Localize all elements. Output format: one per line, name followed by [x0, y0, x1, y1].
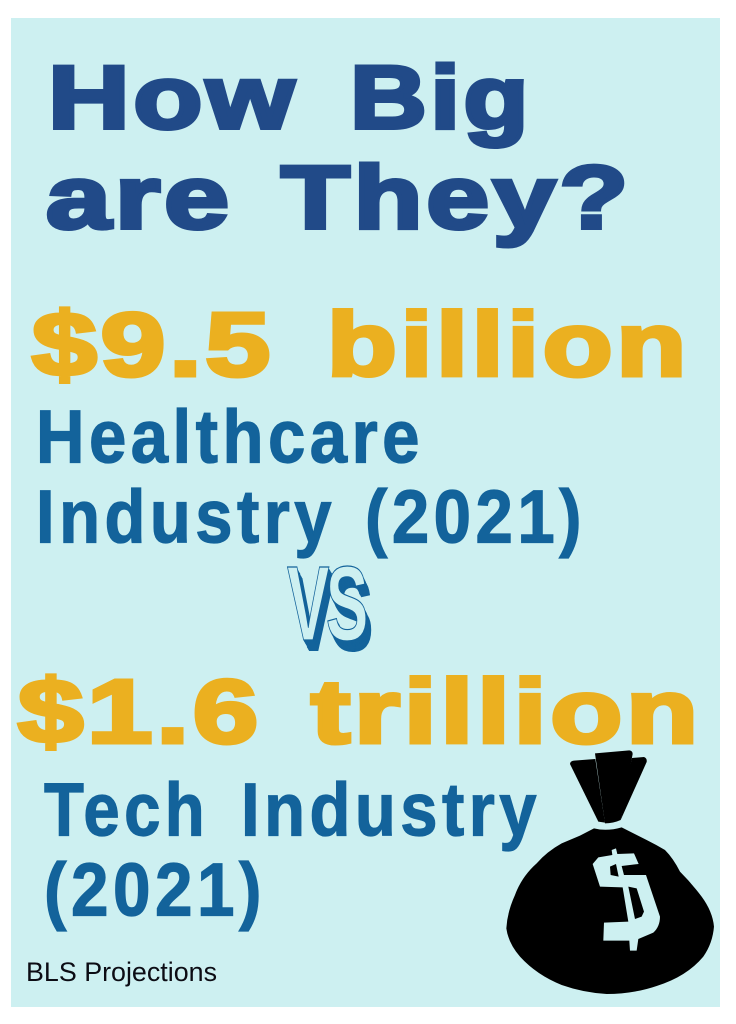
source note: BLS Projections — [26, 957, 217, 987]
label: tech industry — [44, 768, 541, 932]
label: healthcare industry: Industry — [36, 474, 336, 558]
stat: healthcare amount: $9.5 — [32, 296, 274, 396]
title: Big — [350, 47, 532, 147]
label: tech industry: Industry — [241, 768, 541, 852]
stat: tech amount — [18, 662, 702, 762]
title — [46, 47, 632, 247]
label: tech industry: Tech — [44, 768, 209, 852]
stat: healthcare amount: billion — [327, 296, 690, 396]
title: are — [46, 147, 233, 247]
title: How — [48, 47, 298, 147]
label: healthcare industry: Healthcare — [36, 394, 424, 478]
icon: money bag — [506, 750, 714, 994]
label: tech industry: (2021) — [44, 848, 266, 932]
label: healthcare industry: (2021) — [365, 474, 586, 558]
stat: healthcare amount — [32, 296, 690, 396]
vs emblem: VS — [287, 545, 365, 663]
title: They? — [281, 147, 632, 247]
stat: tech amount: trillion — [311, 662, 702, 762]
label: healthcare industry — [36, 394, 586, 558]
stat: tech amount: $1.6 — [18, 662, 262, 762]
